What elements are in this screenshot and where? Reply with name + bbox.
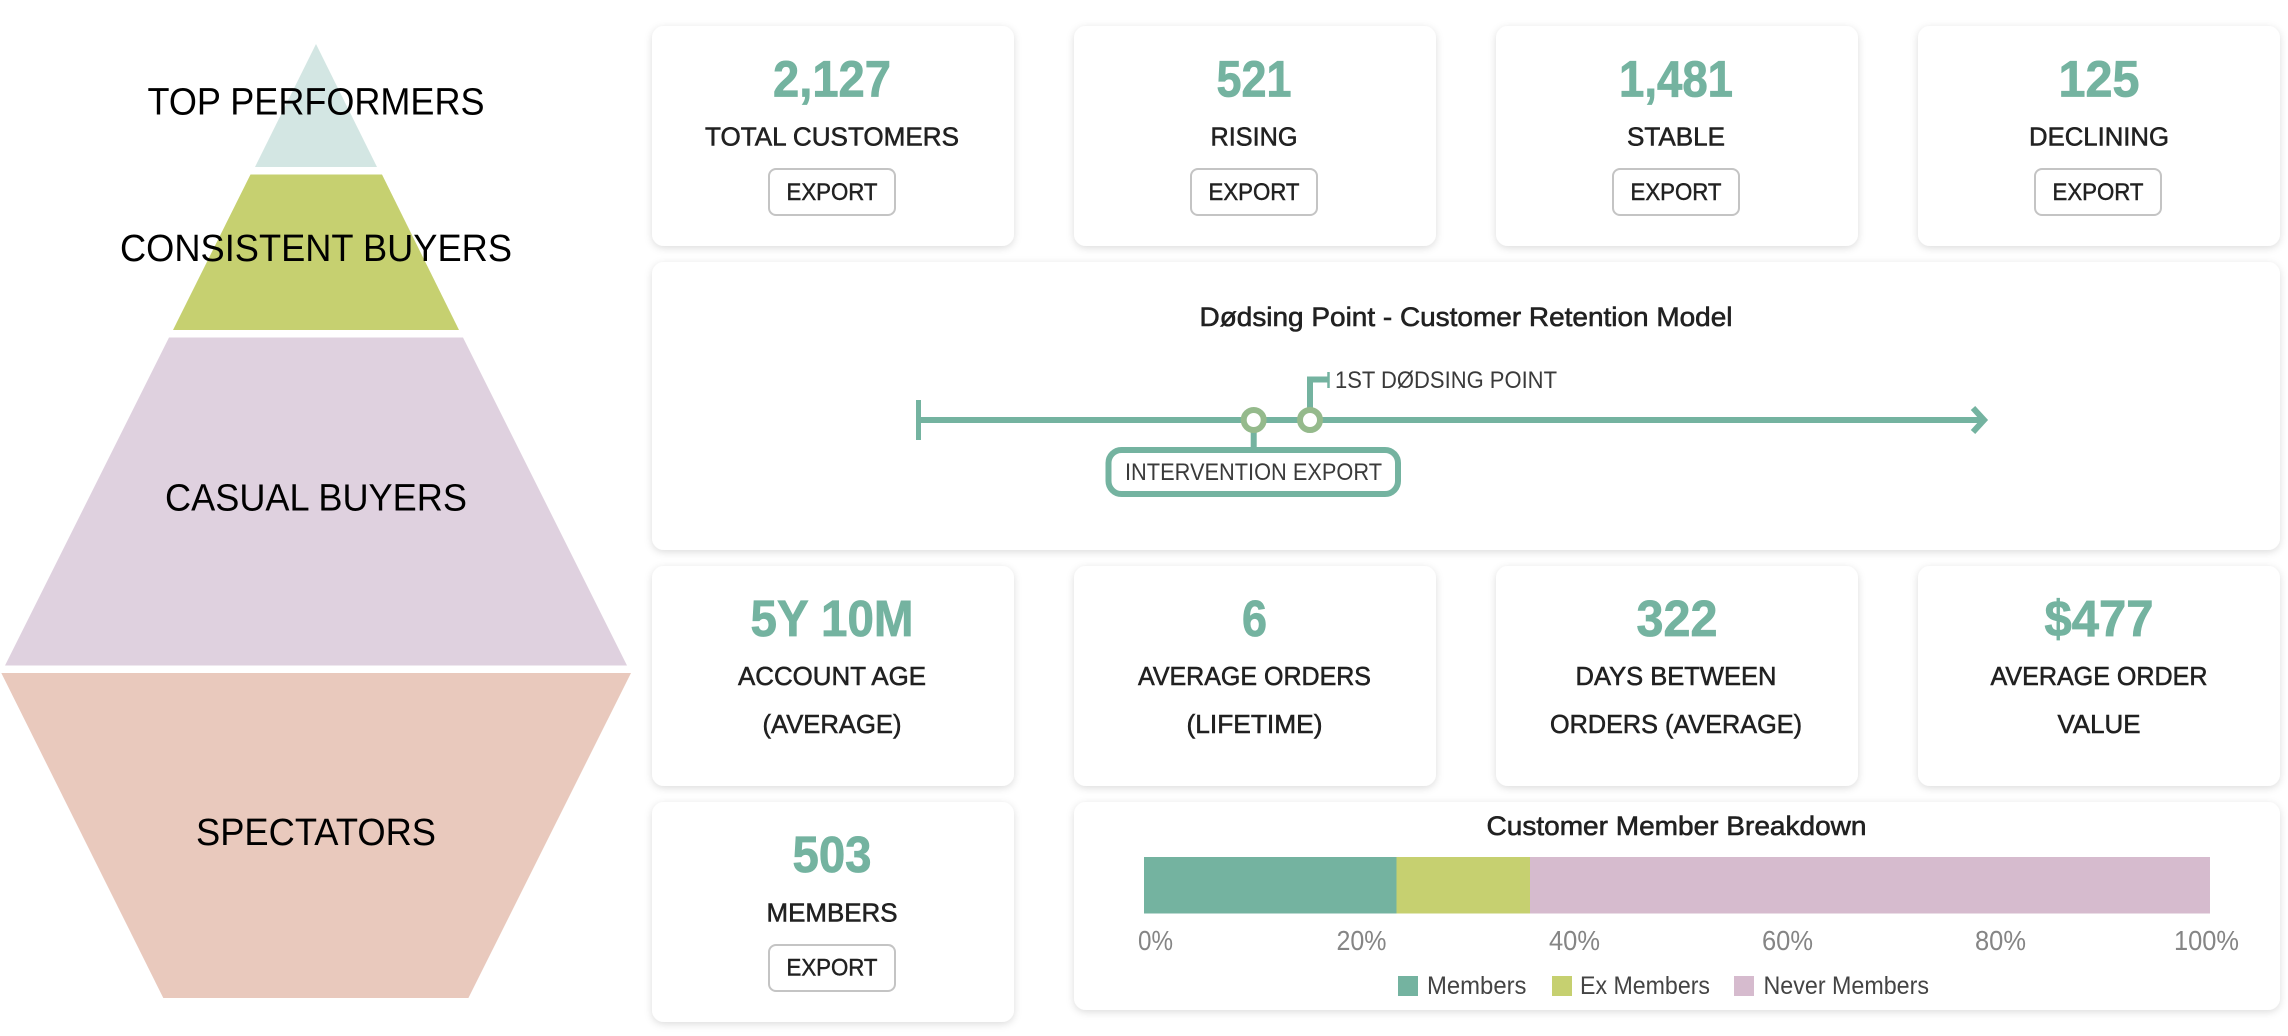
panel: declining: EXPORT	[2052, 179, 2144, 206]
panel: days between orders: DAYS BETWEEN	[1576, 661, 1776, 691]
panel: account age: ACCOUNT AGE	[738, 661, 926, 691]
panel: average orders: (LIFETIME)	[1186, 709, 1322, 739]
marker: 1st dodsing point: 1ST DØDSING POINT	[1335, 367, 1557, 394]
chart axis labels: 80%	[1975, 925, 2026, 956]
panel: average orders	[1074, 566, 1436, 786]
pyramid tier: spectators: SPECTATORS	[196, 812, 436, 854]
panel: days between orders: 322	[1636, 590, 1718, 647]
chart axis labels	[1138, 925, 2239, 956]
panel: days between orders	[1496, 566, 1858, 786]
panel: stable: 1,481	[1619, 50, 1733, 108]
panel: account age: 5Y 10M	[750, 590, 914, 647]
pyramid tier: casual buyers: CASUAL BUYERS	[165, 478, 467, 520]
panel: stable: STABLE	[1627, 122, 1725, 152]
panel: members	[652, 802, 1014, 1022]
marker: intervention export	[1108, 410, 1398, 494]
panel: rising: EXPORT	[1208, 179, 1300, 206]
chart legend: Members	[1427, 972, 1526, 1000]
panel: stable	[1496, 26, 1858, 246]
panel: days between orders: ORDERS (AVERAGE)	[1550, 709, 1802, 739]
panel: customer pyramid	[1, 44, 631, 998]
pyramid tier: top performers: TOP PERFORMERS	[148, 82, 484, 124]
panel: members: MEMBERS	[766, 898, 898, 928]
pyramid tier: consistent buyers	[120, 174, 512, 330]
marker: intervention export: INTERVENTION EXPORT	[1125, 459, 1382, 486]
chart axis labels: 40%	[1549, 925, 1600, 956]
panel: average order value: VALUE	[2058, 709, 2140, 739]
panel: members: EXPORT	[786, 954, 878, 982]
panel: total customers	[652, 26, 1014, 246]
panel: members: 503	[792, 826, 872, 883]
panel: rising: RISING	[1210, 122, 1298, 152]
panel: account age: (AVERAGE)	[762, 709, 902, 739]
stacked bar chart	[1144, 857, 2210, 914]
panel: average order value	[1918, 566, 2280, 786]
panel: rising: 521	[1216, 50, 1292, 108]
panel: total customers: 2,127	[773, 50, 891, 108]
panel: total customers: TOTAL CUSTOMERS	[705, 122, 959, 152]
pyramid tier: spectators	[1, 673, 631, 998]
panel: declining	[1918, 26, 2280, 246]
panel: average orders: 6	[1242, 590, 1267, 647]
panel: rising	[1074, 26, 1436, 246]
marker: 1st dodsing point	[1300, 367, 1557, 430]
heading: retention model: Dødsing Point - Customer Retention Model	[1200, 302, 1732, 332]
panel: average orders: AVERAGE ORDERS	[1138, 661, 1371, 691]
chart axis labels: 0%	[1138, 925, 1173, 956]
panel: stable: EXPORT	[1630, 179, 1722, 206]
panel: retention model timeline	[652, 262, 2280, 550]
chart axis labels: 100%	[2174, 925, 2239, 956]
panel: total customers: EXPORT	[786, 179, 878, 206]
panel: account age	[652, 566, 1014, 786]
chart legend: Ex Members	[1580, 972, 1710, 1000]
pyramid tier: casual buyers	[5, 338, 627, 666]
panel: average order value: $477	[2044, 590, 2154, 647]
panel: declining: 125	[2058, 50, 2140, 108]
heading: member breakdown: Customer Member Breakdown	[1486, 811, 1866, 841]
panel: average order value: AVERAGE ORDER	[1990, 661, 2208, 691]
pyramid tier: consistent buyers: CONSISTENT BUYERS	[120, 228, 512, 270]
chart legend: Never Members	[1764, 972, 1929, 1000]
chart axis labels: 20%	[1336, 925, 1386, 956]
pyramid tier: top performers	[148, 44, 484, 167]
panel: declining: DECLINING	[2029, 122, 2169, 152]
chart legend	[1398, 972, 1929, 1000]
chart axis labels: 60%	[1762, 925, 1813, 956]
timeline axis with arrow	[918, 400, 1984, 440]
panel: customer member breakdown	[1074, 802, 2280, 1010]
